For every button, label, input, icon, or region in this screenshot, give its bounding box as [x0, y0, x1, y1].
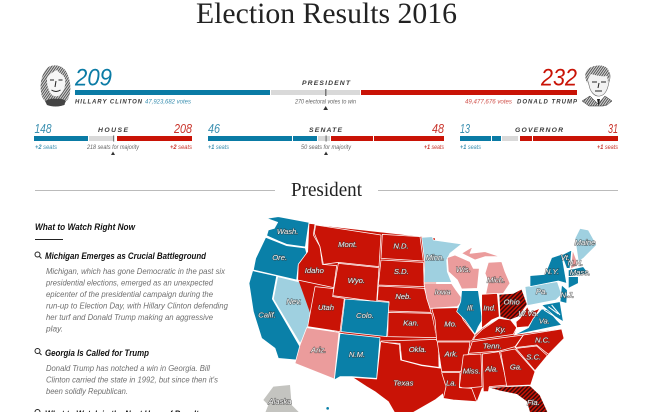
senate dem seats: 46 — [208, 122, 220, 136]
sidebar heading: What to Watch Right Now — [35, 222, 136, 232]
president bar — [75, 89, 577, 96]
map: eastern states — [422, 228, 597, 412]
governor dem seats: 13 — [460, 122, 470, 136]
map labels: east: Ky. — [495, 325, 506, 334]
map labels: east: S.C. — [526, 352, 541, 361]
panel: president scoreboard — [41, 64, 612, 110]
map labels: east: Fla. — [527, 398, 540, 407]
map labels: west: Calif. — [258, 310, 276, 319]
map labels: east: Wis. — [456, 265, 471, 274]
senate notes: +1 seats — [208, 144, 230, 151]
story body: play. — [45, 324, 63, 334]
map labels: east: Ill. — [467, 304, 474, 313]
map labels: west: Wyo. — [348, 276, 365, 285]
house notes: +2 seats — [35, 144, 58, 151]
icon: magnifier — [35, 252, 42, 258]
house notes: +2 seats — [170, 144, 193, 151]
governor notes — [460, 144, 619, 151]
map labels: west: Mont. — [338, 240, 357, 249]
panel: president scoreboard: DONALD TRUMP — [517, 100, 578, 106]
clinton electoral votes: 209 — [74, 64, 112, 92]
panel: senate — [208, 122, 445, 155]
panel: house — [34, 122, 193, 155]
map labels: west — [258, 227, 427, 406]
president label: PRESIDENT — [302, 80, 351, 87]
trump electoral votes: 232 — [540, 64, 577, 92]
map labels: east: Minn. — [426, 253, 444, 262]
map labels: east: Miss. — [463, 366, 481, 375]
map labels: west: Ariz. — [310, 346, 326, 355]
map labels: east: N.J. — [561, 290, 574, 299]
house dem seats: 148 — [34, 122, 52, 136]
story headline: Michigan Emerges as Crucial Battleground — [45, 251, 207, 261]
map labels: east: Va. — [539, 317, 550, 326]
map labels: east: N.Y. — [545, 267, 559, 276]
map labels: west: S.D. — [394, 267, 409, 276]
governor notes: +1 seats — [460, 144, 482, 151]
map labels: east: Pa. — [536, 287, 547, 296]
senate bar — [208, 136, 444, 142]
map labels: west: Utah — [318, 303, 334, 312]
icon: Donald Trump portrait — [582, 65, 612, 106]
house gop seats: 208 — [173, 122, 192, 136]
map labels: east: Mass. — [570, 268, 590, 277]
map labels: east: Ohio — [504, 297, 520, 306]
map labels: west: Colo. — [356, 311, 374, 320]
map labels: east: Iowa — [435, 288, 451, 297]
map labels: east: Maine — [575, 238, 595, 247]
map labels: east: Mich. — [487, 276, 505, 285]
map labels: east: Ark. — [444, 349, 458, 358]
house label: HOUSE — [98, 127, 128, 134]
map labels: west: Okla. — [409, 345, 427, 354]
panel: governor — [460, 122, 619, 151]
story body: epicenter of the presidential campaign during the — [46, 289, 213, 299]
map labels: east: Vt. — [561, 253, 570, 262]
map labels: west: N.D. — [393, 242, 409, 251]
icon: magnifier — [35, 348, 42, 355]
map labels: east — [426, 238, 595, 407]
story body: Donald Trump has notched a win in Georgia. Bill — [46, 363, 211, 373]
panel: what to watch — [35, 222, 228, 412]
map labels: east: Tenn. — [483, 341, 502, 350]
map labels: west: Texas — [393, 378, 414, 387]
story body — [46, 363, 218, 396]
trump votes and name: 49,477,676 votes — [465, 98, 513, 106]
map labels: west: Wash. — [277, 227, 298, 236]
story body: presidential elections, emerged as an unexpected — [45, 278, 213, 288]
section heading: President: President — [291, 180, 363, 201]
map labels: east: N.C. — [535, 335, 550, 344]
story body — [45, 266, 228, 334]
map labels: west: N.M. — [349, 350, 365, 359]
map labels: east: La. — [446, 379, 457, 388]
governor label: GOVERNOR — [515, 127, 563, 134]
senate notes: +1 seats — [424, 144, 445, 151]
senate notes — [208, 144, 445, 155]
map labels: east: N.H. — [568, 259, 583, 268]
story body: run-up to Election Day, with Hillary Clinton defending — [46, 300, 228, 310]
map labels: east: Ala. — [484, 364, 498, 373]
house notes — [35, 144, 193, 155]
map labels: west: Nev. — [286, 297, 302, 306]
senate gop seats: 48 — [432, 122, 444, 136]
icon: Hillary Clinton portrait — [41, 65, 70, 106]
story body: been solidly Republican. — [46, 386, 128, 396]
story body: Michigan, which has gone Democratic in the past six — [46, 266, 226, 276]
governor bar — [460, 136, 618, 141]
governor notes: +1 seats — [597, 144, 619, 151]
house notes: 218 seats for majority — [86, 144, 140, 151]
map labels: west: Idaho — [305, 266, 325, 275]
governor gop seats: 31 — [608, 122, 618, 136]
map labels: east: Ga. — [510, 363, 522, 372]
threshold marker — [323, 106, 328, 110]
map labels: west: Kan. — [403, 318, 419, 327]
senate label: SENATE — [309, 127, 342, 134]
map labels: west: Neb. — [395, 292, 411, 301]
map labels: east: W.Va. — [518, 309, 538, 318]
senate notes: 50 seats for majority — [301, 144, 352, 151]
house bar — [34, 136, 192, 142]
map labels: east: Mo. — [444, 319, 457, 328]
panel: president scoreboard: 47,923,682 votes — [145, 98, 192, 106]
story body: her turf and Donald Trump making an aggressive — [46, 312, 213, 322]
map labels: west: Ore. — [272, 253, 287, 262]
map: western states — [249, 217, 446, 412]
map labels: east: Ind. — [483, 303, 496, 312]
map labels: west: Alaska — [268, 397, 291, 406]
story: Michigan — [35, 251, 228, 334]
story: Georgia — [35, 348, 218, 396]
win threshold note: 270 electoral votes to win — [294, 98, 356, 106]
story body: Clinton carried the state in 1992, but since then it's — [46, 374, 218, 384]
story headline: Georgia Is Called for Trump — [45, 348, 150, 358]
clinton name and votes: HILLARY CLINTON — [75, 100, 143, 106]
